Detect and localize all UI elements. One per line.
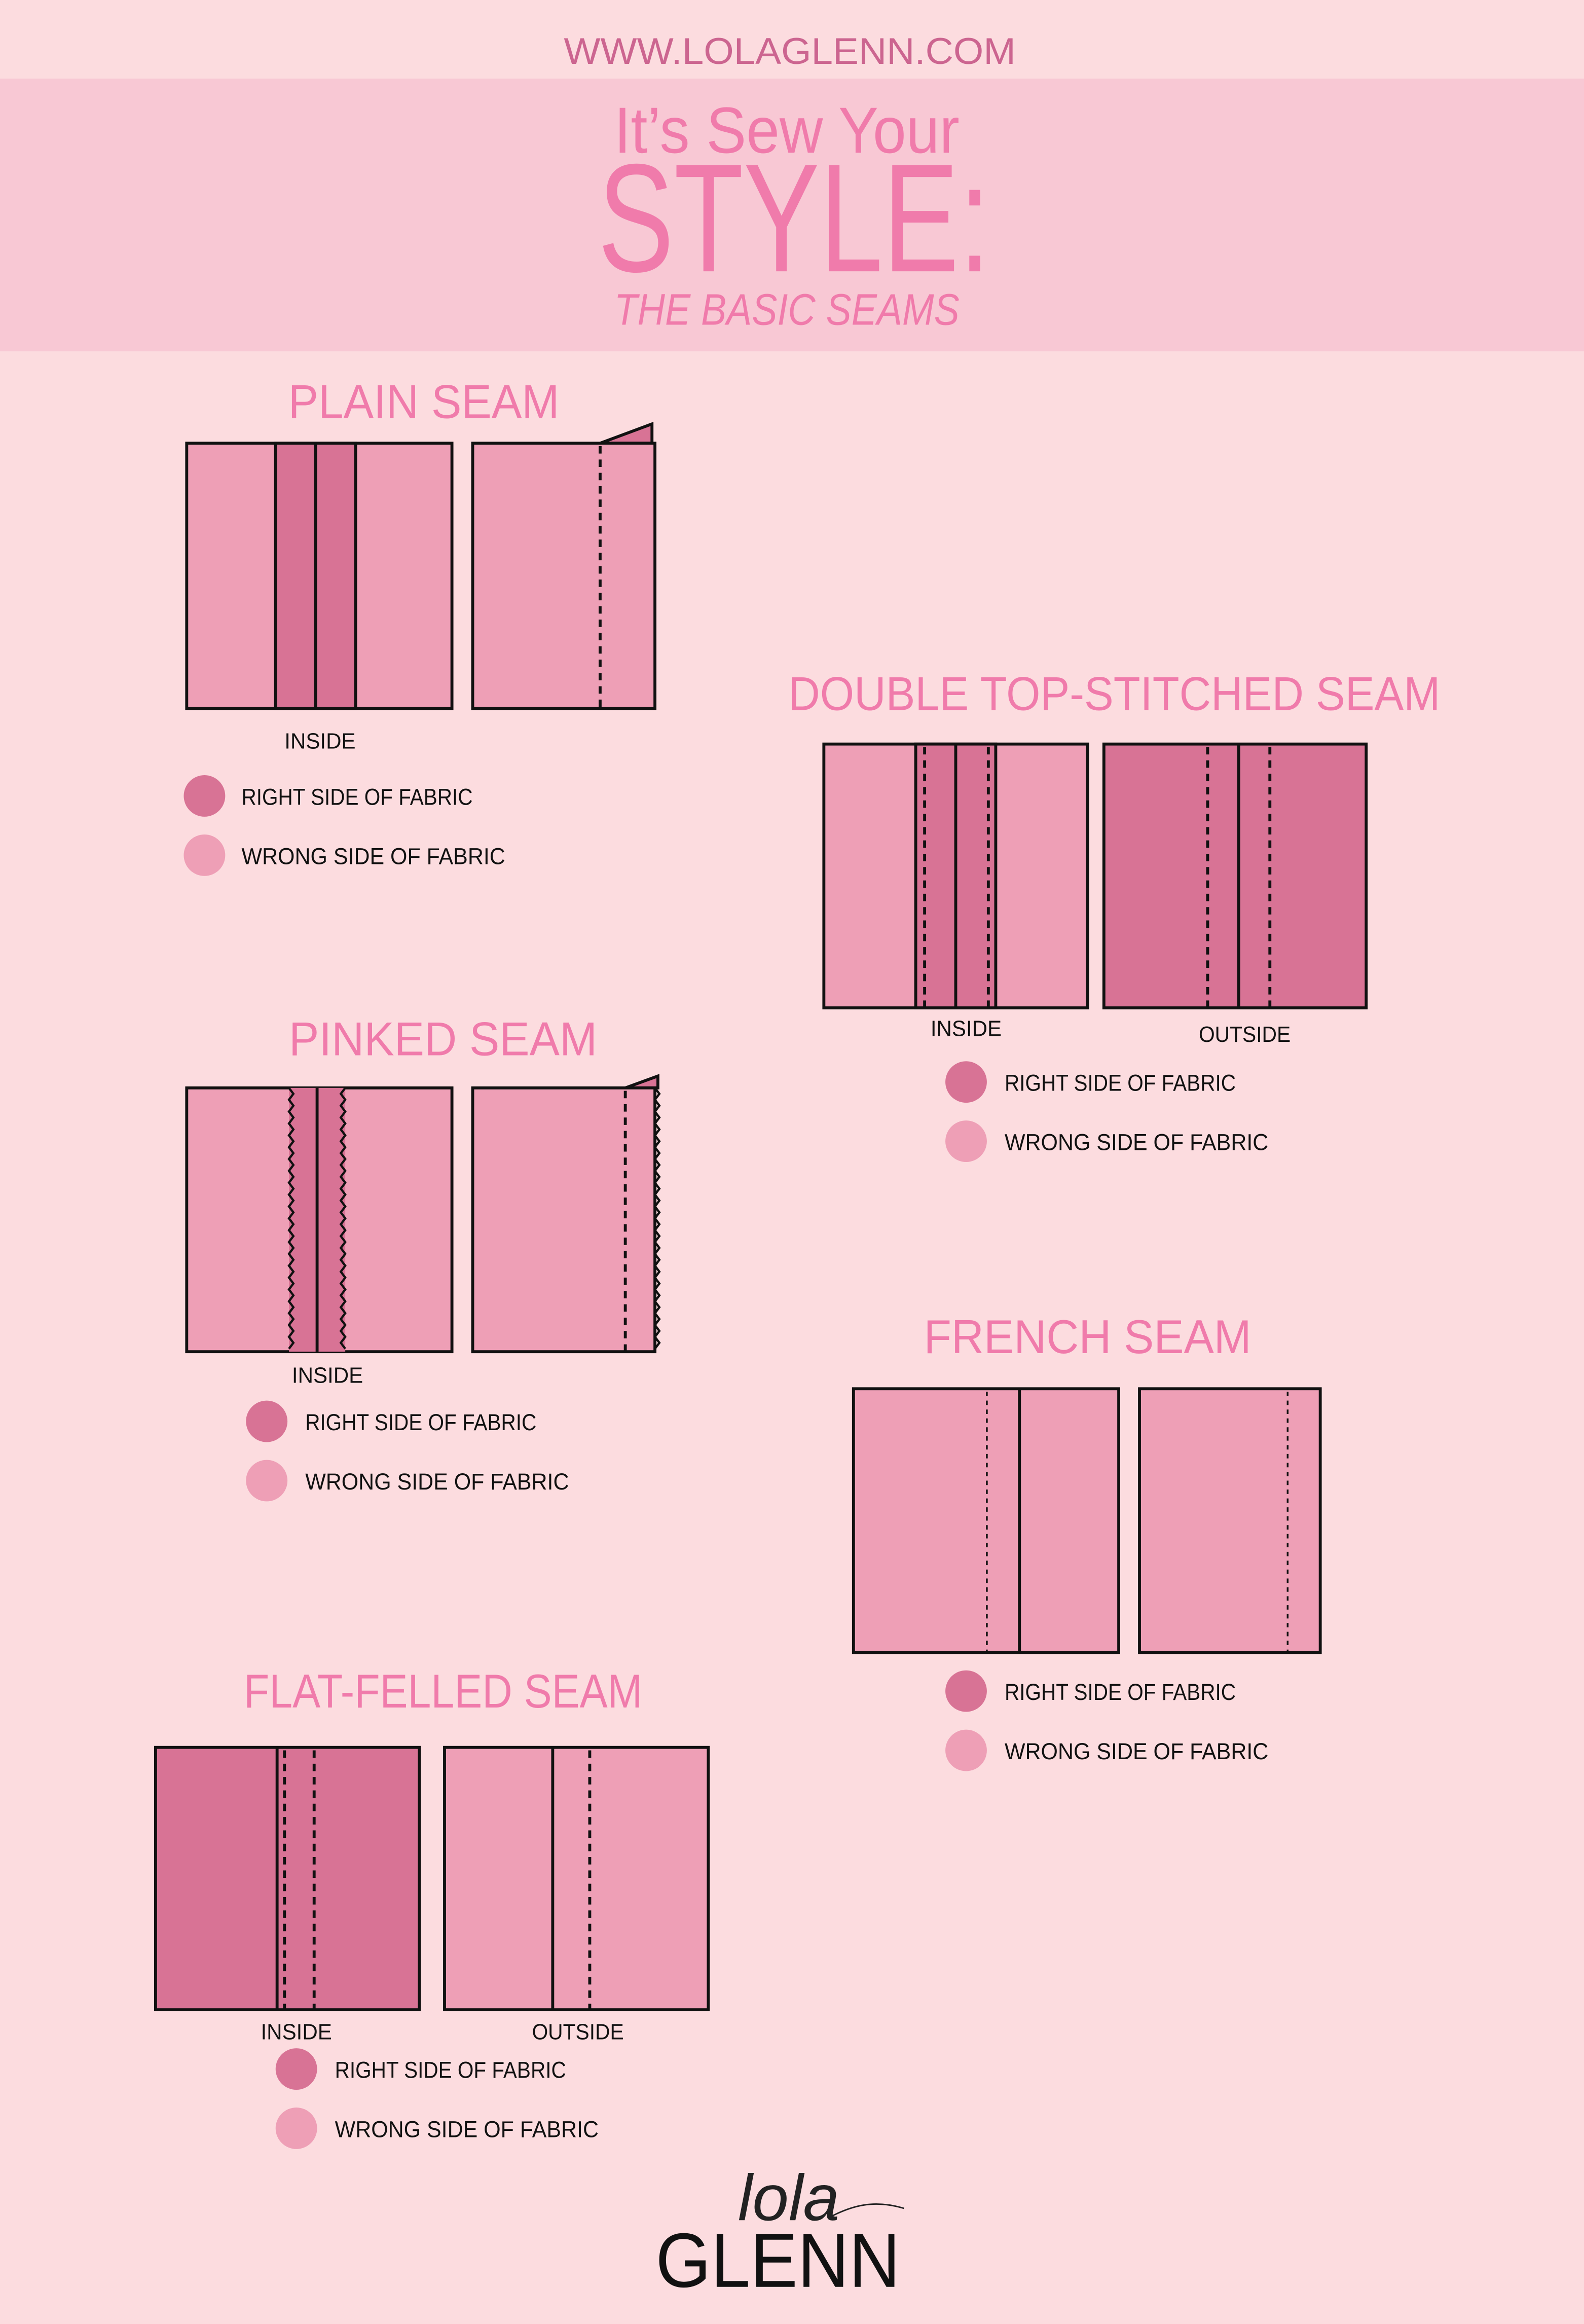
label inside: INSIDE bbox=[261, 2020, 332, 2045]
legend: plain seam bbox=[183, 775, 505, 876]
diagram: french outside bbox=[1139, 1389, 1320, 1653]
diagram: pinked outside bbox=[473, 1076, 659, 1352]
diagram: plain seam outside bbox=[473, 424, 655, 708]
label outside: OUTSIDE bbox=[532, 2020, 624, 2045]
legend: plain seam: WRONG SIDE OF FABRIC bbox=[241, 843, 505, 869]
legend: flat-felled bbox=[276, 2048, 599, 2149]
subtitle: THE BASIC SEAMS bbox=[614, 284, 960, 334]
heading: french: FRENCH SEAM bbox=[924, 1310, 1251, 1363]
legend: double bbox=[945, 1061, 1268, 1162]
panel: french seam bbox=[854, 1310, 1320, 1771]
legend: pinked: RIGHT SIDE OF FABRIC bbox=[305, 1409, 536, 1435]
diagram: double inside bbox=[824, 744, 1088, 1008]
diagram: double outside bbox=[1104, 744, 1366, 1008]
logo script lola: lola bbox=[738, 2162, 839, 2234]
legend: pinked bbox=[246, 1401, 569, 1501]
panel: pinked seam bbox=[187, 1012, 659, 1501]
panel: double top-stitched seam bbox=[788, 667, 1440, 1162]
panel: flat-felled seam bbox=[156, 1664, 708, 2149]
diagram: french inside bbox=[854, 1389, 1119, 1653]
legend: flat-felled: WRONG SIDE OF FABRIC bbox=[335, 2117, 599, 2143]
panel: plain seam bbox=[183, 375, 655, 876]
diagram: plain seam inside bbox=[187, 443, 452, 708]
legend: double: WRONG SIDE OF FABRIC bbox=[1005, 1130, 1268, 1155]
heading: double top-stitched: DOUBLE TOP-STITCHED SEAM bbox=[788, 667, 1440, 720]
logo GLENN: GLENN bbox=[656, 2218, 900, 2304]
heading: plain seam: PLAIN SEAM bbox=[288, 375, 560, 428]
legend: flat-felled: RIGHT SIDE OF FABRIC bbox=[335, 2057, 566, 2083]
logo bbox=[656, 2162, 904, 2304]
label outside: OUTSIDE bbox=[1199, 1022, 1291, 1047]
legend: double: RIGHT SIDE OF FABRIC bbox=[1005, 1070, 1236, 1096]
header band bbox=[0, 79, 1584, 351]
website url: WWW.LOLAGLENN.COM bbox=[564, 31, 1016, 72]
label inside: INSIDE bbox=[284, 729, 356, 753]
heading: pinked: PINKED SEAM bbox=[289, 1012, 597, 1066]
title line 1: It’s Sew Your bbox=[614, 94, 960, 167]
legend: pinked: WRONG SIDE OF FABRIC bbox=[305, 1469, 569, 1495]
heading: flat-felled: FLAT-FELLED SEAM bbox=[244, 1664, 642, 1718]
diagram: flat-felled outside bbox=[445, 1748, 708, 2010]
title STYLE: STYLE: bbox=[598, 132, 990, 304]
legend: french: WRONG SIDE OF FABRIC bbox=[1005, 1738, 1268, 1764]
diagram: pinked inside bbox=[187, 1088, 452, 1352]
label inside: INSIDE bbox=[931, 1016, 1002, 1041]
label inside: INSIDE bbox=[292, 1363, 363, 1388]
diagram: flat-felled inside bbox=[156, 1748, 419, 2010]
legend: french: RIGHT SIDE OF FABRIC bbox=[1005, 1679, 1236, 1705]
legend: plain seam: RIGHT SIDE OF FABRIC bbox=[241, 784, 473, 810]
legend: french bbox=[945, 1671, 1268, 1771]
